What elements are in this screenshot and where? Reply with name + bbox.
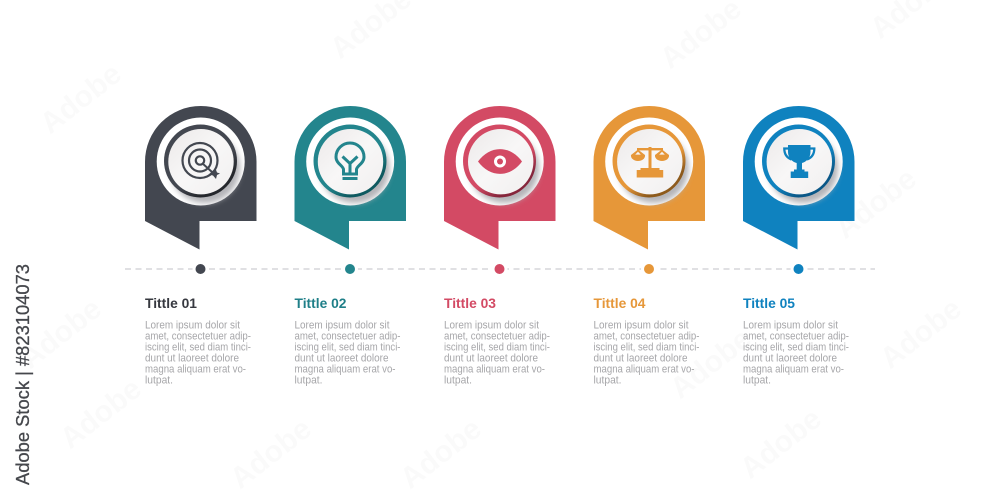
heading 3: Tittle 03 (444, 295, 496, 311)
badge ring (612, 124, 686, 198)
dashed timeline (125, 268, 875, 270)
heading 1: Tittle 01 (145, 295, 197, 311)
body 2: magna aliquam erat vo- (294, 364, 396, 376)
badge disc (468, 129, 533, 194)
timeline marker 4 (641, 261, 657, 277)
body 5: Lorem ipsum dolor sit (743, 320, 838, 332)
body 1 (145, 320, 251, 386)
body 3: iscing elit, sed diam tinci- (444, 342, 550, 354)
text block 3 (444, 295, 550, 386)
pin: teal (294, 106, 406, 249)
body 5: magna aliquam erat vo- (743, 364, 844, 376)
badge ring (463, 124, 536, 198)
body 3: dunt ut laoreet dolore (444, 352, 538, 364)
heading 2: Tittle 02 (294, 295, 347, 311)
badge disc (617, 129, 682, 194)
text block 1 (145, 295, 251, 386)
stock id label: Adobe Stock | #823104073 (13, 264, 33, 485)
body 5: amet, consectetuer adip- (743, 330, 849, 342)
body 4 (594, 320, 700, 386)
body 5: dunt ut laoreet dolore (743, 352, 837, 364)
body 1: iscing elit, sed diam tinci- (145, 342, 251, 354)
body 3: Lorem ipsum dolor sit (444, 320, 539, 332)
body 3: lutpat. (444, 374, 472, 386)
step 4: balance (594, 106, 705, 249)
body 4: amet, consectetuer adip- (594, 330, 700, 342)
text block 2 (294, 295, 401, 386)
body 4: dunt ut laoreet dolore (594, 352, 688, 364)
heading 5: Tittle 05 (743, 295, 795, 311)
body 3: magna aliquam erat vo- (444, 364, 545, 376)
step 1: target (145, 106, 256, 249)
icon: eye (478, 149, 522, 174)
white ring (755, 118, 843, 206)
body 4: magna aliquam erat vo- (594, 364, 695, 376)
body 1: lutpat. (145, 374, 173, 386)
white ring (605, 118, 693, 206)
body 2: Lorem ipsum dolor sit (294, 320, 390, 332)
step 5: trophy (743, 106, 855, 249)
white ring (157, 118, 245, 206)
white ring (456, 118, 544, 206)
icon: target (182, 143, 220, 179)
step 2: idea (294, 106, 406, 249)
body 3: amet, consectetuer adip- (444, 330, 550, 342)
body 1: Lorem ipsum dolor sit (145, 320, 240, 332)
text block 5 (743, 295, 849, 386)
badge disc (318, 129, 383, 194)
body 2: iscing elit, sed diam tinci- (294, 342, 401, 354)
step 3: vision (444, 106, 556, 250)
white ring (306, 118, 394, 206)
badge ring (164, 124, 237, 198)
badge disc (767, 129, 832, 194)
body 1: magna aliquam erat vo- (145, 364, 246, 376)
timeline marker 2 (342, 261, 358, 277)
body 4: lutpat. (594, 374, 622, 386)
body 1: dunt ut laoreet dolore (145, 352, 239, 364)
body 4: iscing elit, sed diam tinci- (594, 342, 700, 354)
heading 4: Tittle 04 (594, 295, 646, 311)
body 3 (444, 320, 550, 386)
badge disc (168, 129, 234, 194)
body 5 (743, 320, 849, 386)
body 2 (294, 320, 401, 386)
pin: dark (145, 106, 256, 249)
text block 4 (594, 295, 700, 386)
badge ring (314, 124, 386, 198)
body 5: iscing elit, sed diam tinci- (743, 342, 849, 354)
pin: red (444, 106, 556, 250)
body 2: lutpat. (294, 374, 322, 386)
body 4: Lorem ipsum dolor sit (594, 320, 689, 332)
icon: trophy (784, 145, 814, 178)
body 5: lutpat. (743, 374, 771, 386)
body 2: dunt ut laoreet dolore (294, 352, 389, 364)
icon: light bulb (336, 143, 364, 178)
timeline marker 1 (192, 261, 208, 277)
pin: orange (594, 106, 705, 249)
pin: blue (743, 106, 855, 249)
badge ring (762, 124, 835, 198)
timeline marker 3 (492, 261, 508, 277)
body 1: amet, consectetuer adip- (145, 330, 251, 342)
body 2: amet, consectetuer adip- (294, 330, 401, 342)
timeline marker 5 (790, 261, 806, 277)
icon: scales (631, 147, 669, 178)
